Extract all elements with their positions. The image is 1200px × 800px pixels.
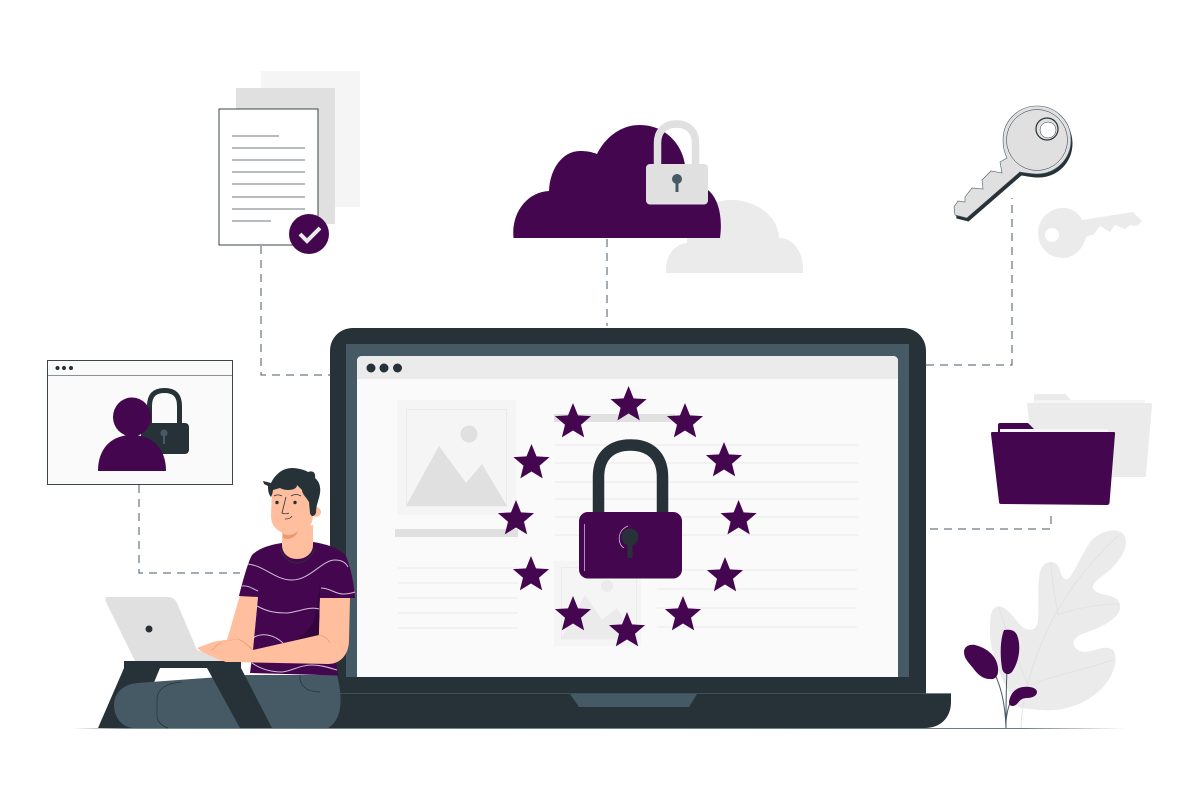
person working on a small laptop	[98, 468, 355, 728]
dashed connectors	[139, 198, 1051, 573]
laptop: base	[322, 694, 951, 728]
icon: grey folder	[1027, 394, 1152, 477]
person: trousers	[114, 675, 341, 728]
person: table legs behind	[98, 668, 160, 728]
laptop: body and screen	[322, 328, 951, 728]
icon: large key	[954, 106, 1072, 222]
plant: large grey leaf	[990, 530, 1126, 728]
person: small laptop	[105, 597, 228, 661]
plant: small purple sprout	[964, 630, 1037, 728]
person: right arm and hand	[197, 598, 350, 664]
padlock in circle of stars	[498, 386, 757, 646]
stars	[498, 386, 757, 646]
icon: user box with lock	[48, 360, 232, 484]
person: hair	[263, 468, 320, 516]
ground line	[73, 728, 1125, 729]
person: left arm	[227, 595, 258, 652]
icon: documents with check	[219, 71, 360, 254]
laptop: browser window	[357, 356, 898, 677]
icon: grey background cloud	[666, 200, 803, 273]
person: table top and front leg	[124, 661, 272, 728]
icon: purple cloud with padlock	[513, 124, 721, 238]
icon: grey key	[1038, 208, 1142, 258]
person: neck and head	[271, 480, 321, 559]
padlock	[579, 445, 682, 578]
icon: purple folder	[991, 423, 1115, 505]
person: shirt	[239, 542, 355, 676]
person: fingers over keyboard	[197, 639, 253, 662]
